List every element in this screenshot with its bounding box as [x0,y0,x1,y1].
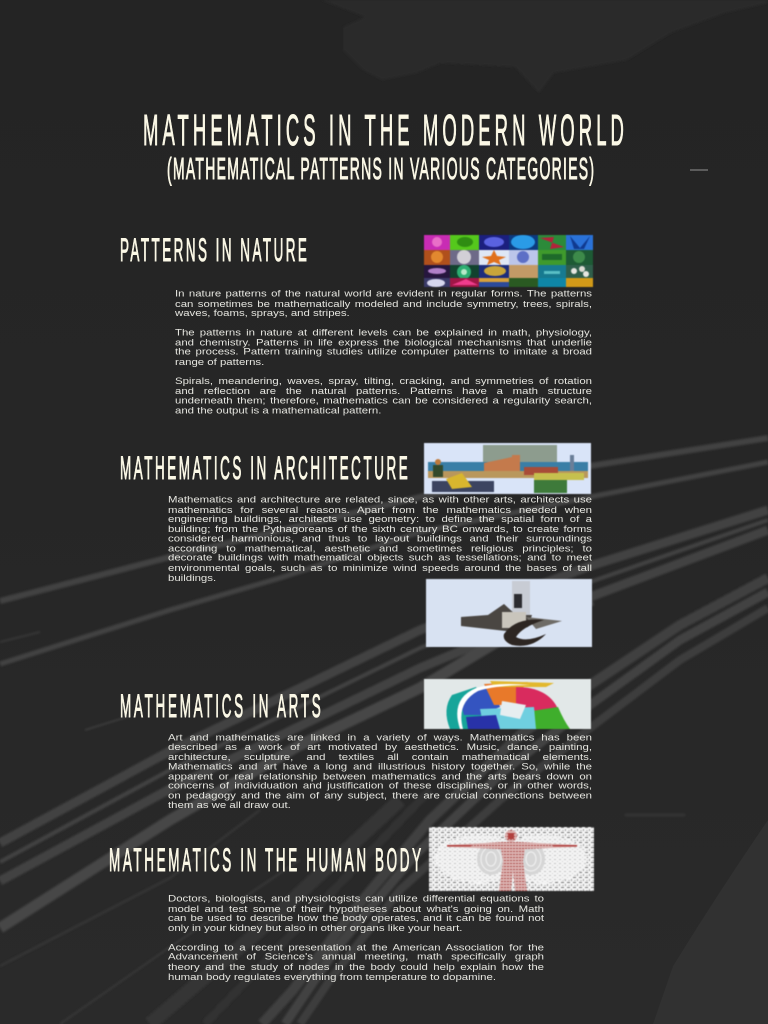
text block: mathematics in arts: concerns of individuation and justification of these disciplines, or in other words, [168,781,592,791]
heading: patterns in nature: PATTERNS IN NATURE [120,234,307,268]
heading: mathematics in the human body: MATHEMATICS IN THE HUMAN BODY [109,844,421,879]
text block: mathematics in architecture: Mathematics and architecture are related, since, as with other arts, architects use [168,495,592,505]
text block: patterns in nature: underneath them; therefore, mathematics can be considered a regularity search, [175,395,592,406]
text block: mathematics in architecture: engineering buildings, architects use geometry: to define the spatial form of a [168,515,592,525]
heading: mathematics in arts: MATHEMATICS IN ARTS [120,690,321,725]
text block: patterns in nature [175,289,592,416]
text block: patterns in nature: The patterns in nature at different levels can be explained in math, physiology, [175,328,592,338]
text block: mathematics in architecture [168,495,592,583]
text block: mathematics in the human body: can be used to describe how the body operates, and it can be found not [168,913,544,923]
image: colourful brain artwork [423,678,592,730]
text block: patterns in nature: In nature patterns of the natural world are evident in regular forms. The patterns [175,289,592,299]
text block: mathematics in arts: on pedagogy and the aim of any subject, there are crucial connections between [168,791,592,801]
image: architecture collage [423,442,592,495]
text block: mathematics in architecture: environmental goals, such as to minimize wind speeds around the bases of tall [168,563,592,573]
text block: mathematics in the human body: human body regulates everything from temperature to dopamine. [168,971,496,981]
text block: mathematics in the human body [168,894,544,982]
text block: mathematics in arts: described as a work of art motivated by aesthetics. Music, dance, painting, [168,742,592,752]
text block: mathematics in arts: Art and mathematics are linked in a variety of ways. Mathematics has been [168,733,592,743]
text block: mathematics in architecture: considered harmonious, and thus to lay-out buildings and their surroundings [168,534,592,544]
text block: mathematics in the human body: theory and the study of nodes in the body could help explain how the [168,962,544,972]
image: human body made of numbers [428,826,595,892]
text block: patterns in nature: range of patterns. [175,357,264,367]
text block: mathematics in architecture: according to mathematical, aesthetic and sometimes religious principles; to [168,544,592,554]
text block: mathematics in the human body: only in your kidney but also in other organs like your heart. [168,923,462,933]
text block: patterns in nature: the process. Pattern training studies utilize computer patterns to imitate a broad [175,347,592,357]
text block: patterns in nature: and chemistry. Patterns in life express the biological mechanisms that underlie [175,337,592,347]
title: MATHEMATICS IN THE MODERN WORLD [143,106,624,155]
text block: mathematics in architecture: building; from the Pythagoreans of the sixth century BC onwards, to create forms [168,524,592,534]
text block: mathematics in the human body: According to a recent presentation at the American Association for the [168,942,544,952]
text block: patterns in nature: and reflection are the natural patterns. Patterns have a math structure [175,386,592,396]
text block: mathematics in arts: apparent or real relationship between mathematics and the arts bears down on [168,771,592,781]
text block: mathematics in architecture: mathematics for several reasons. Apart from the mathematics needed when [168,505,592,515]
text block: mathematics in the human body: Advancement of Science's annual meeting, math specifically graph [168,952,544,962]
text block: mathematics in the human body: model and test some of their hypotheses about what's going on. Math [168,903,544,913]
text block: mathematics in architecture: decorate buildings with mathematical objects such as tessellations; and to meet [168,553,592,564]
text block: mathematics in arts: architecture, sculpture, and textiles all contain mathematical elements. [168,752,592,762]
text block: mathematics in arts: Mathematics and art have a long and illustrious history together. So, while the [168,762,592,772]
heading: mathematics in architecture: MATHEMATICS IN ARCHITECTURE [120,452,408,487]
text block: mathematics in the human body: Doctors, biologists, and physiologists can utilize differential equations to [168,894,544,904]
image: architectural sculpture [425,578,593,648]
text block: patterns in nature: Spirals, meandering, waves, spray, tilting, cracking, and symmetries of rotation [175,376,592,386]
text block: mathematics in architecture: buildings. [168,573,216,583]
text block: patterns in nature: waves, foams, sprays, and stripes. [175,308,350,318]
text block: mathematics in arts: them as we all draw out. [168,800,291,810]
subtitle: (MATHEMATICAL PATTERNS IN VARIOUS CATEGORIES) [167,152,594,187]
text block: patterns in nature: can sometimes be mathematically modeled and include symmetry, trees, spirals, [175,298,592,308]
text block: mathematics in arts [168,733,592,810]
text block: patterns in nature: and the output is a mathematical pattern. [175,405,381,415]
image: nature pattern mosaic [423,234,594,288]
